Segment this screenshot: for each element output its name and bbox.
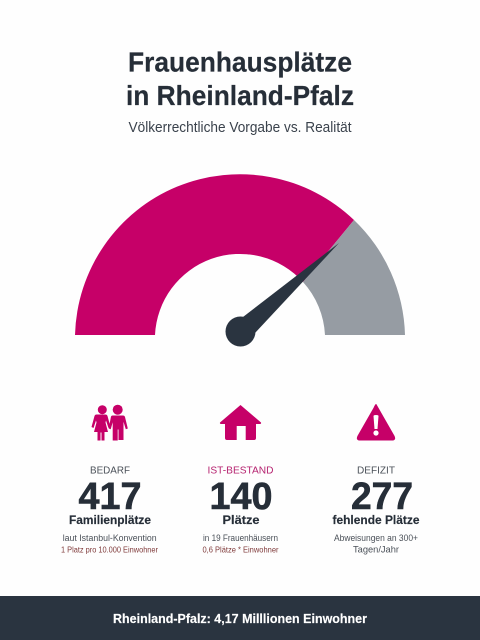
panel: Ist-Bestand bbox=[202, 405, 279, 554]
gauge chart bbox=[75, 174, 405, 346]
footer bar bbox=[0, 596, 480, 640]
description: Tagen/Jahr bbox=[353, 544, 399, 554]
gauge segment: Ist-Bestand bbox=[75, 174, 354, 335]
unit: fehlende Plätze bbox=[332, 513, 420, 527]
subtitle: Völkerrechtliche Vorgabe vs. Realität bbox=[128, 120, 352, 136]
note: 0,6 Plätze * Einwohner bbox=[202, 546, 279, 554]
label: DEFIZIT bbox=[357, 464, 396, 476]
unit: Plätze bbox=[222, 513, 260, 527]
label: IST-BESTAND bbox=[208, 464, 274, 476]
panel: Defizit bbox=[332, 404, 420, 554]
title: in Rheinland-Pfalz bbox=[126, 80, 354, 111]
description: Abweisungen an 300+ bbox=[334, 533, 418, 543]
icon: house bbox=[220, 405, 261, 440]
gauge segment: Defizit bbox=[303, 220, 405, 335]
icon: couple bbox=[92, 405, 128, 440]
number: 417 bbox=[78, 476, 142, 518]
unit: Familienplätze bbox=[69, 513, 151, 527]
icon: warning triangle bbox=[357, 404, 395, 440]
title bbox=[126, 46, 354, 111]
note: 1 Platz pro 10.000 Einwohner bbox=[61, 546, 158, 554]
description bbox=[334, 533, 418, 554]
description: laut Istanbul-Konvention bbox=[63, 533, 157, 543]
panel: Bedarf bbox=[61, 405, 158, 554]
number: 140 bbox=[210, 476, 272, 518]
description: in 19 Frauenhäusern bbox=[203, 533, 278, 543]
gauge needle bbox=[226, 243, 339, 346]
title: Frauenhausplätze bbox=[128, 46, 352, 78]
footer text: Rheinland-Pfalz: 4,17 Milllionen Einwohner bbox=[113, 612, 367, 626]
label: BEDARF bbox=[90, 464, 130, 476]
number: 277 bbox=[351, 476, 413, 518]
